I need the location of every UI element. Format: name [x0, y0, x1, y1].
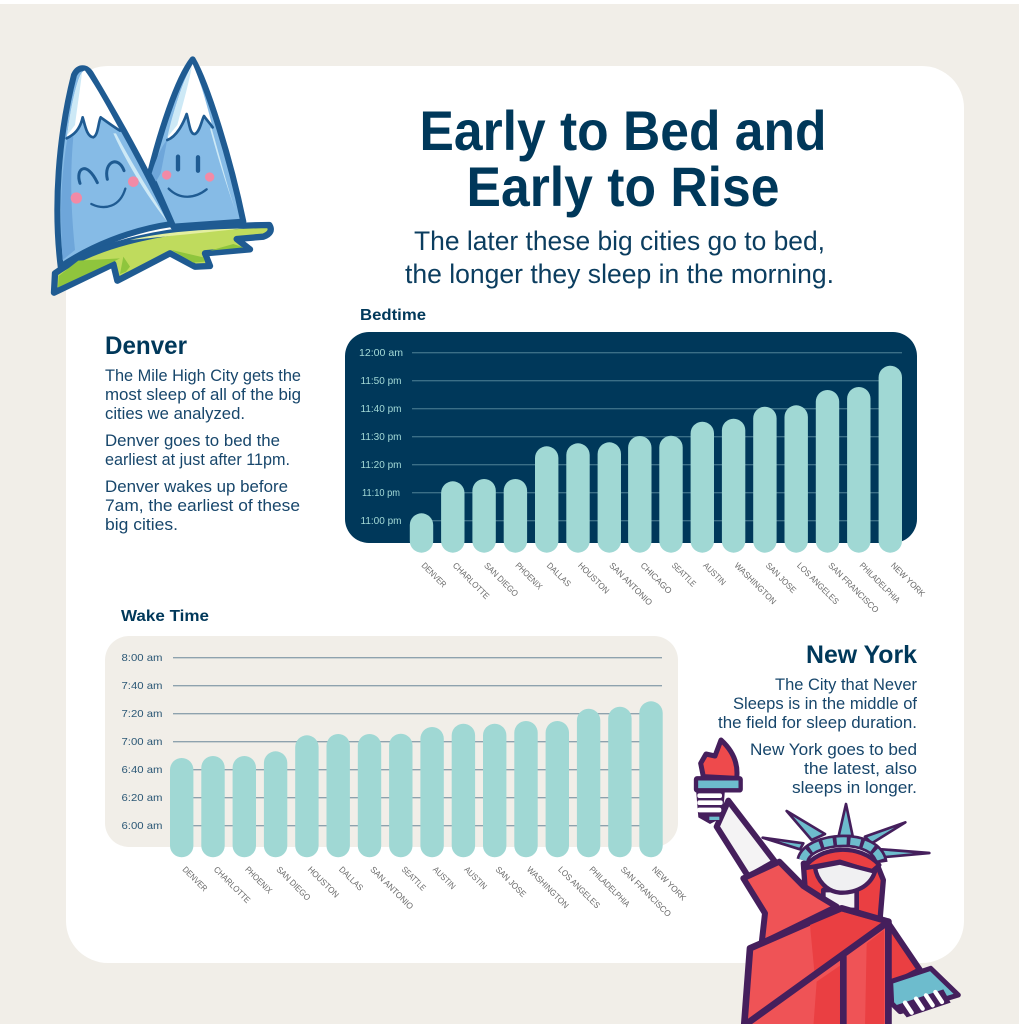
crown band	[803, 841, 881, 863]
x axis labels: NEW YORK	[889, 560, 927, 599]
x axis labels: DALLAS	[545, 560, 573, 589]
chart: Wake Time	[105, 636, 688, 919]
y axis labels: 11:30 pm	[360, 432, 402, 443]
x axis labels: SAN JOSE	[494, 864, 528, 899]
x axis labels: HOUSTON	[306, 864, 341, 900]
y axis labels: 11:00 pm	[360, 516, 402, 527]
x axis labels: AUSTIN	[701, 560, 728, 587]
white card	[66, 66, 964, 963]
panel: New York text: New York	[806, 641, 917, 669]
title: Early to Rise	[466, 155, 780, 218]
x axis labels: SAN JOSE	[764, 560, 799, 595]
hair	[803, 863, 883, 920]
chart: Bedtime	[345, 332, 927, 615]
y axis labels: 12:00 am	[359, 348, 403, 359]
subtitle	[405, 226, 834, 289]
x axis labels: WASHINGTON	[732, 560, 778, 606]
panel: New York text: the latest, also	[804, 760, 917, 778]
x axis labels: SEATTLE	[400, 864, 428, 893]
panel: Denver text: Denver	[105, 332, 187, 360]
y axis labels: 11:20 pm	[360, 460, 402, 471]
x axis labels: CHARLOTTE	[212, 864, 253, 905]
subtitle: the longer they sleep in the morning.	[405, 259, 834, 289]
x axis labels: DENVER	[181, 864, 210, 893]
panel: Denver text: earliest at just after 11pm.	[105, 451, 290, 469]
bars	[410, 366, 902, 553]
x axis labels: DENVER	[420, 560, 449, 589]
y axis labels: 11:10 pm	[362, 488, 400, 499]
grass ledge	[54, 225, 271, 293]
panel: Denver text: The Mile High City gets the	[105, 367, 301, 385]
robe folds	[745, 922, 888, 1024]
x axis labels: LOS ANGELES	[795, 560, 841, 606]
raised arm	[717, 801, 775, 877]
y axis labels: 7:00 am	[122, 737, 162, 748]
panel: New York text: Sleeps is in the middle of	[733, 695, 917, 713]
panel: Denver text: most sleep of all of the big	[105, 386, 301, 404]
x axis labels: AUSTIN	[462, 864, 489, 891]
y axis labels: 7:20 am	[122, 709, 162, 720]
x axis labels: AUSTIN	[431, 864, 458, 891]
x axis labels: SAN DIEGO	[274, 864, 313, 903]
y axis labels: 6:40 am	[122, 765, 162, 776]
torch cup	[696, 778, 741, 790]
x axis labels: NEW YORK	[650, 864, 688, 903]
panel: New York text: The City that Never	[775, 676, 918, 694]
x axis labels: SAN FRANCISCO	[619, 864, 673, 919]
x axis labels: SAN ANTONIO	[368, 864, 416, 912]
icon: Statue of Liberty	[696, 740, 958, 1024]
x axis labels: SAN FRANCISCO	[826, 560, 881, 615]
x axis labels: HOUSTON	[576, 560, 611, 596]
left mountain	[57, 68, 172, 267]
robe	[743, 908, 888, 1024]
x axis labels: LOS ANGELES	[556, 864, 602, 910]
face	[815, 863, 875, 893]
x axis labels	[420, 560, 927, 615]
x axis labels: PHOENIX	[243, 864, 274, 896]
y axis labels	[122, 653, 162, 832]
panel: New York text: New York goes to bed	[750, 741, 917, 759]
x axis labels: CHICAGO	[639, 560, 674, 596]
title: Early to Bed and	[420, 99, 826, 162]
panel: Denver text: big cities.	[105, 516, 178, 534]
panel: Denver text: Denver wakes up before	[105, 478, 288, 496]
torch hand	[696, 789, 725, 824]
heading: Bedtime: Bedtime	[360, 307, 426, 324]
torch flame	[701, 740, 737, 778]
panel: New York text: sleeps in longer.	[792, 779, 917, 797]
x axis labels: PHILADELPHIA	[858, 560, 902, 605]
right mountain	[150, 59, 243, 227]
x axis labels: DALLAS	[337, 864, 366, 893]
y axis labels: 11:40 pm	[360, 404, 402, 415]
x axis labels: WASHINGTON	[525, 864, 571, 910]
left sleeve	[743, 862, 837, 943]
tablet	[891, 968, 958, 1017]
y axis labels: 7:40 am	[122, 681, 162, 692]
panel: Denver text	[105, 332, 301, 534]
panel: Denver text: cities we analyzed.	[105, 405, 245, 423]
x axis labels: CHARLOTTE	[451, 560, 492, 601]
icon: smiling mountains	[54, 59, 271, 293]
panel: New York text: the field for sleep duration.	[718, 714, 917, 732]
hair band	[804, 850, 879, 872]
x axis labels	[181, 864, 688, 919]
panel: Denver text: Denver goes to bed the	[105, 432, 280, 450]
x axis labels: PHILADELPHIA	[587, 864, 632, 909]
x axis labels: SAN DIEGO	[482, 560, 521, 599]
y axis labels: 6:20 am	[122, 793, 162, 804]
y axis labels	[359, 348, 403, 527]
x axis labels: PHOENIX	[513, 560, 545, 592]
heading: Wake Time: Wake Time	[121, 608, 209, 625]
right arm	[888, 923, 920, 987]
neck	[823, 890, 857, 910]
bars	[170, 701, 663, 857]
panel: Denver text: 7am, the earliest of these	[105, 497, 300, 515]
crown spikes	[763, 804, 929, 857]
y axis labels: 11:50 pm	[360, 376, 402, 387]
y axis labels: 8:00 am	[122, 653, 162, 664]
y axis labels: 6:00 am	[122, 821, 162, 832]
x axis labels: SEATTLE	[670, 560, 698, 589]
title	[420, 99, 826, 218]
subtitle: The later these big cities go to bed,	[414, 226, 825, 256]
x axis labels: SAN ANTONIO	[607, 560, 655, 608]
panel: New York text	[718, 641, 918, 797]
